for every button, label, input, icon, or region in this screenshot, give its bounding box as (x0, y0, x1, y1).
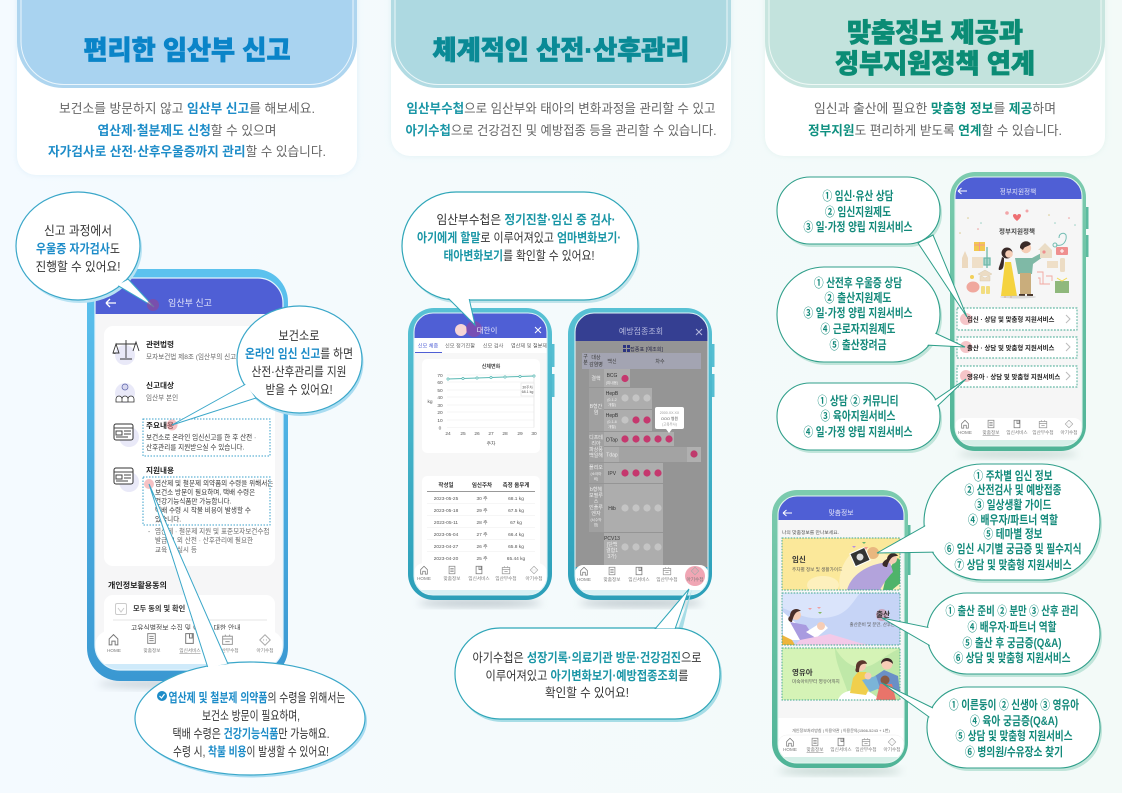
line chart: 27 (488, 431, 494, 437)
data table: 28 주 (476, 520, 488, 526)
bottom navigation: 아기수첩 (526, 575, 542, 582)
line chart: 40 (437, 395, 443, 401)
callout: 온라인 임신 신고 (172, 306, 364, 425)
callout: 아기수첩: 아기수첩은 성장기록·의료기관 방문·건강검진으로 (472, 650, 702, 665)
bottom navigation (778, 735, 904, 765)
text block: 정부지원도 편리하게 받도록 연계할 수 있습니다. (808, 123, 1062, 138)
bottom navigation: HOME (958, 430, 972, 435)
line chart: 24 (445, 431, 451, 437)
information card: 보건소 방문이 필요하며, 택배 수령은 (155, 488, 255, 496)
panel: 맞춤정보 제공과 정부지원정책 연계 (765, 0, 1105, 156)
card: 영유아 (782, 648, 905, 700)
vaccination table: 개월) (608, 402, 616, 407)
line chart: kg (427, 399, 433, 405)
data table: 66.4 kg (508, 532, 524, 538)
screen header: 정부지원정책 (1000, 187, 1036, 196)
vaccination table: B형간 (590, 403, 603, 410)
line chart: 70 (437, 373, 443, 379)
callout: 임신 지원: ① 임신·유산 상담 (822, 189, 894, 203)
line chart: 25 (460, 431, 466, 437)
callout: 임신 맞춤정보: ⑦ 상담 및 맞춤형 지원서비스 (954, 557, 1072, 572)
callout: 영유아 맞춤정보: ① 이른둥이 ② 신생아 ③ 영유아 (949, 698, 1079, 712)
bottom navigation: 맞춤정보 (604, 576, 620, 583)
line chart: 28 (502, 431, 508, 437)
bottom navigation: 아기수첩 (687, 576, 703, 583)
screen header (95, 278, 283, 314)
callout: 출산 지원: ⑤ 출산장려금 (830, 338, 886, 352)
consent section: 개인정보활용동의 (108, 580, 167, 590)
bottom navigation: 임신서비스 (1006, 429, 1028, 436)
phone: 정부지원정책 (950, 172, 1088, 458)
bottom navigation: 맞춤정보 (444, 575, 460, 582)
tabs: 신모 체중 (418, 342, 438, 350)
heading: 맞춤정보 제공과 (847, 18, 1023, 48)
callout: 아기수첩 (455, 589, 722, 722)
bottom navigation: 아기수첩 (884, 746, 900, 753)
vaccination table: HepB (606, 413, 619, 419)
button: 임신: 임신 · 상담 및 맞춤형 지원서비스 (967, 314, 1055, 324)
callout: 출산 지원: ① 산전후 우울증 상담 (814, 275, 902, 290)
data table: 2023-05-11 (434, 520, 458, 526)
callout: 출산 맞춤정보: ⑥ 상담 및 맞춤형 지원서비스 (954, 650, 1070, 665)
line chart: 20 (437, 410, 443, 416)
callout: 출산 맞춤정보: ⑤ 출산 후 궁금증(Q&A) (962, 635, 1062, 650)
callout: 영유아 지원: ④ 일·가정 양립 지원서비스 (804, 424, 912, 439)
text block: 자가검사로 산전·산후우울증까지 관리할 수 있습니다. (48, 144, 326, 159)
bottom navigation: 임신서비스 (628, 576, 650, 583)
callout: 온라인 임신 신고: 산전·산후관리를 지원 (252, 365, 346, 379)
panel: 편리한 임산부 신고 (17, 0, 357, 175)
information card: 엽산제 및 철분제 의약품의 수령을 위해서는 (155, 478, 273, 488)
callout: 출산 지원: ④ 근로자지원제도 (820, 321, 896, 336)
callout: 출산 맞춤정보: ④ 배우자·파트너 역할 (968, 620, 1056, 634)
vaccination table: (단백 (607, 541, 618, 548)
information card: 발급 그 외 산전 · 산후관리에 필요한 (155, 536, 253, 544)
bottom navigation: 임신서비스 (830, 746, 852, 753)
line chart: 68.1 kg (522, 390, 533, 394)
callout: 출산 지원: ② 출산지원제도 (824, 290, 892, 305)
tabs: 엽산제 및 철분제 (511, 342, 547, 350)
vaccination table: (0-1-6 (607, 420, 617, 424)
callout: 임신 맞춤정보: ② 산전검사 및 예방접종 (964, 483, 1062, 497)
callout: 엽산제 및 철분제: 택배 수령은 건강기능식품만 가능해요. (172, 726, 330, 741)
bottom navigation: 아기수첩 (257, 647, 273, 654)
vaccination table (582, 345, 701, 565)
card: 출산 (782, 593, 900, 645)
card: 영유아: 미숙아이부터 영유아까지 (792, 678, 840, 685)
callout: 출산 지원 (777, 267, 965, 365)
tabs: 신모 정기진찰 (445, 342, 475, 350)
data table: 26 주 (476, 544, 488, 550)
data table: 65.8 kg (508, 544, 524, 550)
data table: 25 주 (476, 556, 488, 562)
screen header (414, 313, 547, 338)
phone: 임산부 신고 (87, 269, 288, 689)
line chart: 신체변화 (482, 363, 501, 370)
data table: 2023-04-27 (434, 544, 459, 550)
card: 임신: 주차별 정보 및 생활가이드 (792, 566, 842, 573)
callout: 임신 맞춤정보: ③ 일상생활 가이드 (974, 497, 1052, 512)
bottom navigation: HOME (783, 747, 797, 752)
button: 영유아 (957, 366, 1077, 387)
data table: 68.1 kg (508, 496, 524, 502)
callout: 임신 지원: ② 임신지원제도 (825, 204, 891, 219)
callout: 아기수첩: 확인할 수 있어요! (545, 686, 629, 700)
bottom navigation (96, 630, 282, 670)
vaccination table: 염 (594, 409, 598, 416)
vaccination table: IPV (608, 471, 617, 477)
data table: 2023-05-18 (434, 508, 459, 514)
screen header: 임산부 신고 (168, 297, 212, 308)
screen header (778, 496, 904, 520)
bottom navigation: 아기수첩 (1061, 429, 1077, 436)
bottom navigation: 임산부수첩 (217, 647, 239, 654)
vaccination table: 리아 (591, 440, 601, 447)
information card: 임산부 본인 (146, 393, 178, 402)
vaccination table: DTap (606, 438, 618, 444)
line chart: 29 (517, 431, 523, 437)
bottom navigation (955, 418, 1082, 448)
text block: 아기수첩으로 건강검진 및 예방접종 등을 관리할 수 있습니다. (406, 123, 716, 138)
data table: 2023-05-04 (434, 532, 459, 538)
vaccination table: 파상풍 (589, 446, 603, 453)
vaccination table: 비) (594, 476, 598, 481)
line chart: 26 (474, 431, 480, 437)
callout: 출산 맞춤정보 (882, 593, 1102, 677)
callout: 온라인 임신 신고: 받을 수 있어요! (266, 383, 332, 397)
card: 임신: 임신 (792, 554, 806, 564)
data table (427, 482, 535, 561)
bottom navigation: HOME (417, 576, 431, 581)
bottom navigation: 임산부수첩 (855, 746, 877, 753)
phone: 맞춤정보 (772, 490, 910, 775)
information card: 있습니다. (155, 514, 181, 524)
callout: 임신 맞춤정보: ⑤ 테마별 정보 (984, 527, 1042, 541)
screen header (575, 313, 708, 341)
text block (808, 101, 1062, 138)
button: 임신 (957, 308, 1077, 330)
vaccination table: PCV13 (604, 536, 620, 542)
data table: 27 주 (476, 532, 488, 538)
line chart: 10 (437, 418, 443, 424)
tabs: 신모 검사 (483, 342, 503, 350)
heading: 체계적인 산전·산후관리 (432, 36, 690, 66)
text block (48, 101, 326, 159)
callout: 임산부수첩: 태아변화보기를 확인할 수 있어요! (444, 248, 594, 263)
consent section (104, 581, 275, 632)
vaccination table: Hib (608, 506, 616, 512)
line chart: 30주차 (522, 384, 533, 390)
data table: 67.5 kg (508, 508, 524, 514)
data table: 29 주 (476, 508, 488, 514)
vaccination table: OOO 병원 (661, 416, 678, 421)
vaccination table: 폴리오 (589, 464, 603, 471)
text block: 보건소를 방문하지 않고 임산부 신고를 해보세요. (59, 101, 315, 116)
callout: 우울증 자가검사 (16, 192, 159, 311)
bottom navigation: 맞춤정보 (144, 647, 160, 654)
footer links (778, 718, 903, 740)
vaccination table: (소아마 (590, 471, 602, 476)
vaccination table: 구 (583, 354, 588, 360)
vaccination table: 모필루 (589, 492, 603, 499)
card: 출산: 출산 (876, 609, 890, 619)
data table: 임신주차 (472, 481, 492, 489)
callout: 영유아 맞춤정보 (882, 683, 1102, 771)
consent section: 고유식별정보 수집 및 이용에 대한 안내 (131, 623, 240, 632)
vaccination table: 분 (583, 360, 588, 366)
information card: 신고대상 (146, 380, 174, 390)
callout: 임신 맞춤정보 (877, 464, 1102, 583)
text block (406, 101, 716, 138)
callout: 출산 맞춤정보: ① 출산 준비 ② 분만 ③ 산후 관리 (946, 603, 1078, 618)
screen header: 대한이 (477, 325, 497, 335)
line chart (428, 364, 536, 446)
vaccination table: 디프테 (589, 434, 603, 441)
data table: 측정 몸무게 (503, 481, 529, 489)
information card: 모자보건법 제8조 (임산부의 신고 등) (146, 352, 246, 361)
vaccination table: 결합1 (606, 547, 618, 554)
vaccination table: BCG (607, 373, 618, 379)
panel: 체계적인 산전·산후관리 (391, 0, 731, 156)
callout: 임신 맞춤정보: ① 주차별 임신 정보 (974, 469, 1052, 483)
card: 영유아: 영유아 (792, 667, 813, 677)
callout: 엽산제 및 철분제: 수령 시, 착불 비용이 발생할 수 있어요! (173, 744, 329, 759)
heading: 편리한 임산부 신고 (84, 36, 290, 66)
vaccination table: 스 (594, 499, 599, 505)
line chart: 30 (437, 403, 443, 409)
bottom navigation: 임산부수첩 (1032, 429, 1054, 436)
bottom navigation: 맞춤정보 (807, 746, 823, 753)
callout: 온라인 임신 신고: 온라인 임신 신고를 하면 (245, 347, 353, 361)
vaccination table: 백일해 (589, 452, 603, 459)
phone: 맞춤정보: 나의 맞춤정보를 만나보세요. (782, 529, 839, 536)
vaccination table: (피내용) (606, 380, 618, 385)
vaccination table: (0-1-2 (607, 398, 617, 402)
bottom navigation: HOME (577, 577, 591, 582)
callout: 우울증 자가검사: 신고 과정에서 (44, 224, 112, 238)
text block: 임신과 출산에 필요한 맞춤형 정보를 제공하며 (814, 101, 1056, 116)
information card: 건강기능식품만 가능합니다. (155, 496, 232, 506)
heading: 정부지원정책 연계 (835, 49, 1035, 79)
illustration: couple and support items: 정부지원정책 (999, 226, 1035, 236)
callout: 우울증 자가검사: 우울증 자가검사도 (36, 241, 120, 256)
line chart: 주차 (487, 440, 496, 447)
callout: 영유아 맞춤정보: ⑥ 병의원/수유장소 찾기 (965, 744, 1063, 759)
information card (104, 326, 275, 566)
text block: 임산부수첩으로 임산부와 태아의 변화과정을 관리할 수 있고 (406, 101, 716, 116)
vaccination table: 감염병 (589, 361, 603, 368)
vaccination table: 차수 (655, 358, 665, 365)
screen header: 예방접종조회 (619, 326, 663, 336)
vaccination table: 개월) (608, 424, 616, 429)
card: 임신 (782, 538, 905, 594)
callout: 아기수첩: 이루어져있고 아기변화보기·예방접종조회를 (486, 668, 688, 683)
information card: 택배 수령 시 착불 비용이 발생할 수 (155, 506, 251, 514)
callout: 임산부수첩 (402, 192, 640, 325)
data table: 67 kg (510, 520, 522, 526)
line chart: 30 (531, 431, 537, 437)
vaccination table: HepB (606, 391, 619, 397)
information card: 주요내용 (146, 420, 174, 430)
vaccination table: 3가) (607, 553, 617, 560)
tabs (415, 343, 546, 353)
data table: 30 주 (476, 496, 488, 502)
vaccination table: 엔자 (591, 510, 601, 517)
illustration: couple and support items (959, 210, 1076, 298)
callout: 출산 지원: ③ 일·가정 양립 지원서비스 (804, 305, 912, 320)
line chart: 60 (437, 380, 443, 386)
callout: 온라인 임신 신고: 보건소로 (278, 329, 320, 343)
phone: 아기수첩 예방접종조회 (568, 308, 714, 607)
screen header: 맞춤정보 (828, 508, 854, 517)
information card: 산후관리를 지원받으실 수 있습니다. (146, 442, 244, 452)
vaccination table: 접종표 [예조회] (630, 345, 664, 353)
button: 출산 (957, 337, 1077, 358)
data table: 2023-04-20 (434, 556, 459, 562)
vaccination table: 결핵 (591, 375, 601, 382)
bottom navigation (576, 565, 708, 594)
callout: 엽산제 및 철분제: 보건소 방문이 필요하며, (202, 709, 300, 723)
button: 영유아: 영유아 · 상담 및 맞춤형 지원서비스 (967, 372, 1060, 381)
callout: 영유아 지원 (777, 379, 966, 453)
vaccination table: b형헤 (590, 486, 602, 493)
callout: 영유아 지원: ① 상담 ② 커뮤니티 (818, 394, 898, 408)
footer links: 개인정보처리방침 | 이용약관 | 이용문의(1566-5243 + 1번) (792, 727, 890, 733)
bottom navigation: 임산부수첩 (495, 575, 517, 582)
callout: 영유아 맞춤정보: ④ 육아 궁금증(Q&A) (970, 714, 1058, 728)
vaccination table: 대상 (591, 354, 601, 361)
vaccination table: (고육무사) (662, 422, 677, 426)
bottom navigation: 임신서비스 (179, 647, 201, 654)
callout: 엽산제 및 철분제 (135, 484, 367, 778)
information card: 엽산제 · 철분제 지원 및 표준모자보건수첩 (155, 526, 269, 536)
information card: 보건소로 온라인 임신신고를 한 후 산전 · (146, 432, 256, 442)
information card: 교육 등 실시 등 (155, 545, 197, 554)
bottom navigation: 임신서비스 (468, 575, 490, 582)
callout: 임산부수첩: 임산부수첩은 정기진찰·임신 중 검사· (436, 212, 616, 227)
callout: 영유아 지원: ③ 육아지원서비스 (820, 409, 896, 423)
data table: 2023-05-25 (434, 496, 459, 502)
callout: 우울증 자가검사: 진행할 수 있어요! (36, 259, 120, 274)
line chart: 0 (439, 426, 442, 432)
data table: 작성일 (438, 481, 454, 489)
callout: 임신 지원: ③ 일·가정 양립 지원서비스 (804, 219, 912, 234)
callout: 엽산제 및 철분제: 엽산제 및 철분제 의약품의 수령을 위해서는 (168, 690, 346, 705)
vaccination table: 백신 (607, 358, 617, 365)
card: 출산: 출산준비 및 분만, 산후관리 (850, 621, 899, 628)
vaccination table: 2000.XX.XX (660, 411, 680, 415)
callout: 임신 지원 (777, 177, 967, 317)
data table: 65.44 kg (507, 556, 526, 562)
heading (835, 18, 1035, 79)
callout: 영유아 맞춤정보: ⑤ 상담 및 맞춤형 지원서비스 (956, 728, 1072, 743)
bottom navigation: 맞춤정보 (983, 429, 999, 436)
bottom navigation: 임산부수첩 (656, 576, 678, 583)
information card: 지원내용 (146, 465, 174, 475)
vaccination table: (뇌수막 (590, 517, 602, 522)
text block: 엽산제·철분제도 신청할 수 있으며 (98, 123, 276, 138)
phone: 임산부수첩 (408, 308, 554, 607)
line chart: 50 (437, 388, 443, 394)
button: 출산: 출산 · 상담 및 맞춤형 지원서비스 (967, 343, 1055, 352)
vaccination table: 인플루 (589, 504, 603, 511)
screen header (955, 177, 1082, 199)
vaccination table: Tdap (606, 452, 618, 458)
consent section: 모두 동의 및 확인 (133, 604, 185, 613)
callout: 임산부수첩: 아기에게 할말로 이루어져있고 엄마변화보기· (417, 230, 621, 245)
information card: 관련법령 (146, 339, 174, 349)
bottom navigation: HOME (107, 648, 121, 653)
callout: 임신 맞춤정보: ④ 배우자/파트너 역할 (968, 513, 1058, 527)
bottom navigation (418, 566, 542, 594)
information card: - (148, 528, 150, 536)
callout: 임신 맞춤정보: ⑥ 임신 시기별 궁금증 및 필수지식 (944, 541, 1082, 556)
vaccination table: 염) (594, 522, 598, 527)
